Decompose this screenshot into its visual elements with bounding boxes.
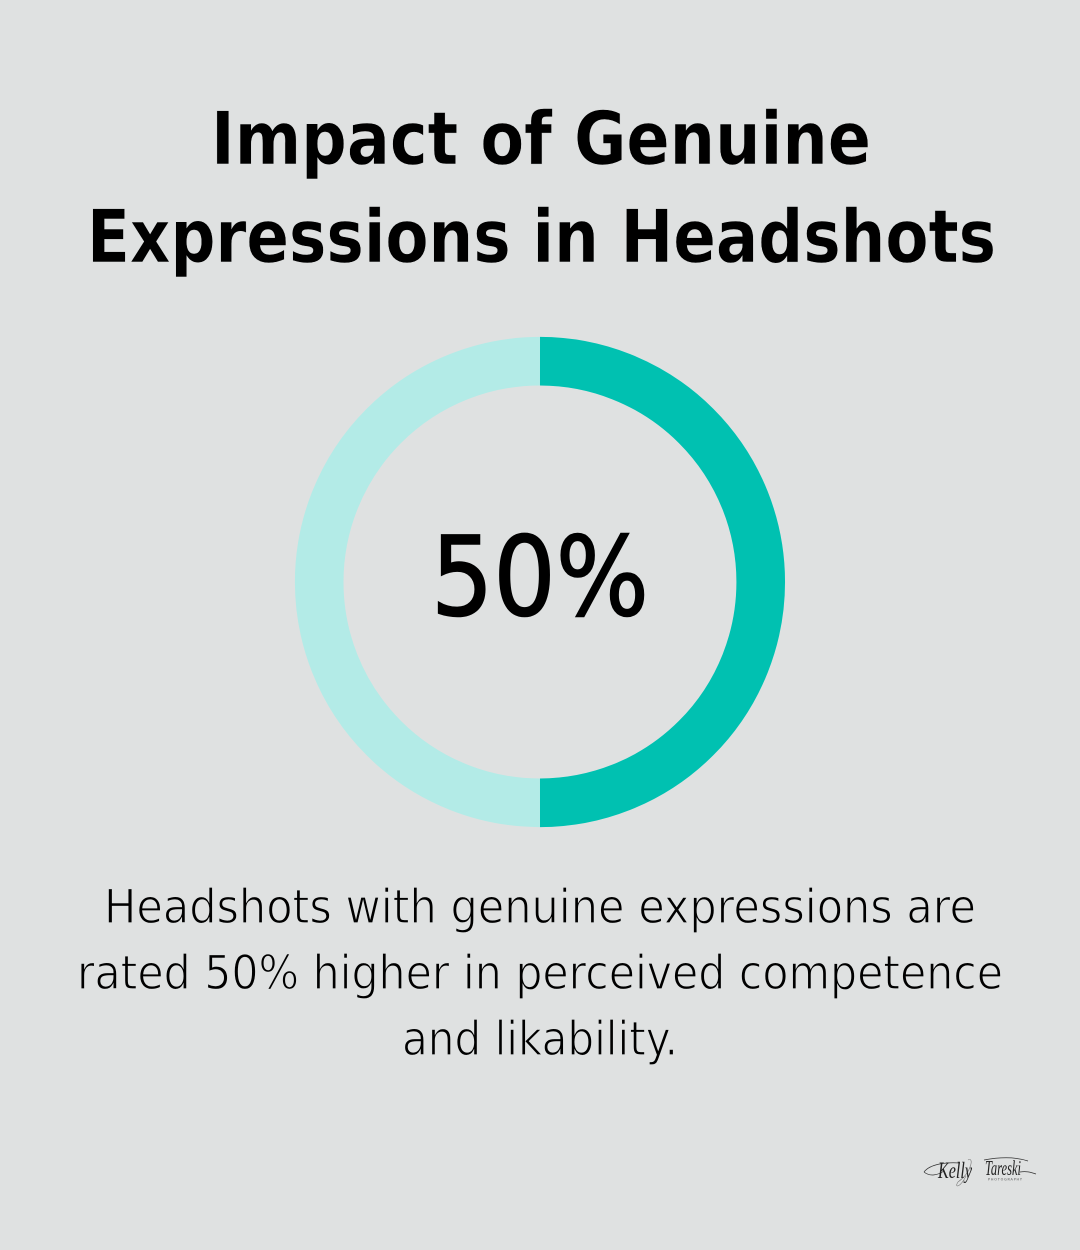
logo: photographer signature: PHOTOGRAPHY [988,1178,1023,1182]
description text: and likability. [402,1012,678,1067]
center value: 50% [431,513,649,641]
logo: photographer signature: Tareski [985,1156,1021,1180]
donut chart: 50% [319,361,761,803]
logo: photographer signature [924,1156,1036,1186]
title: Impact of Genuine [211,97,871,182]
ring track [319,361,761,803]
ring value arc [540,361,761,803]
description text: rated 50% higher in perceived competence [77,946,1003,1001]
description text [77,880,1003,1067]
description text: Headshots with genuine expressions are [104,880,976,935]
title [87,97,996,280]
logo: photographer signature: Kelly [937,1158,973,1183]
